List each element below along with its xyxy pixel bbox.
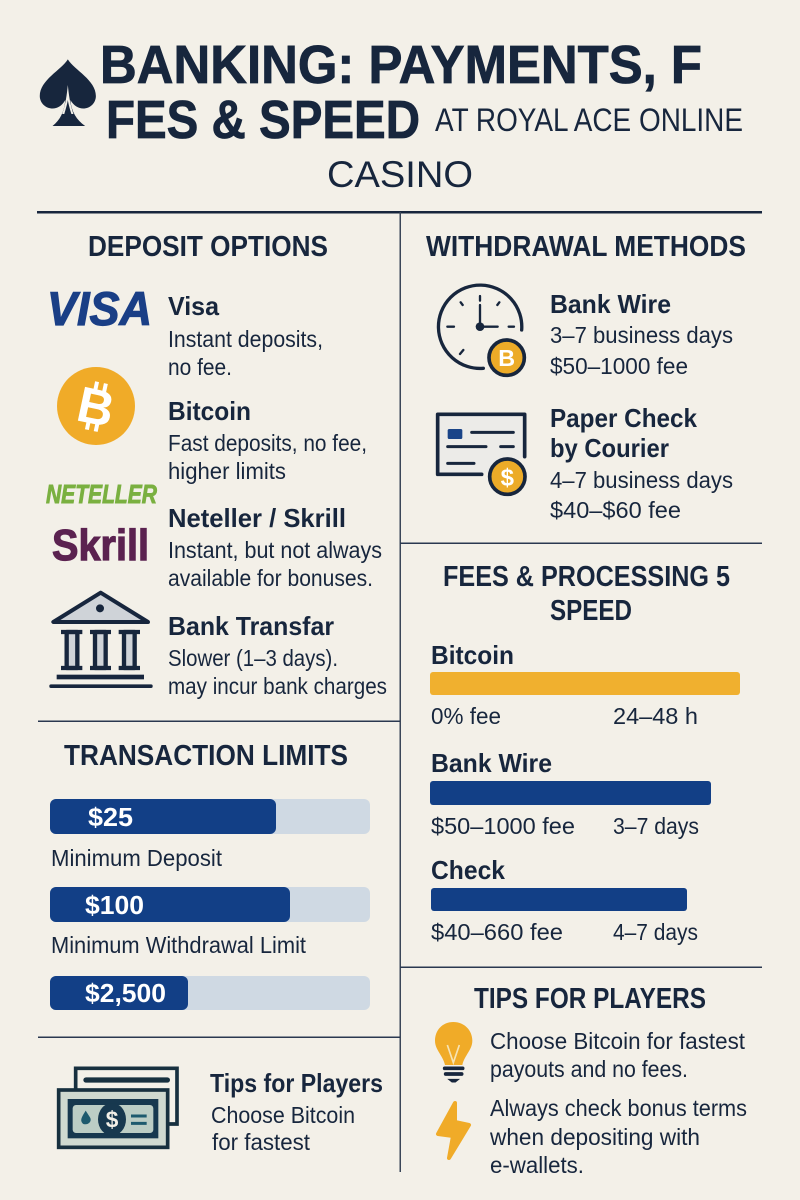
icon: clock with bitcoin coin: B: [498, 345, 515, 371]
item: bank transfer: [168, 611, 387, 699]
icon: bitcoin coin: [57, 367, 135, 445]
title block: [40, 35, 743, 195]
heading: tips for players: TIPS FOR PLAYERS: [474, 983, 706, 1015]
row: bitcoin: 24–48 h: [613, 703, 698, 729]
icon: neteller logo: NETELLER: [46, 479, 157, 509]
bar: maximum limit: $2,500: [85, 978, 166, 1008]
title line 1: BANKING: PAYMENTS, F: [100, 35, 702, 95]
item: paper check by courier: $40–$60 fee: [550, 497, 681, 523]
icon: lightning bolt: [438, 1103, 469, 1158]
title line 2: FES & SPEED: [106, 90, 420, 150]
item: bank transfer: Bank Transfar: [168, 611, 334, 641]
text: tips for players: for fastest: [212, 1129, 311, 1155]
item: bitcoin: Fast deposits, no fee,: [168, 430, 367, 456]
icon: banknotes: [59, 1068, 177, 1147]
text: tips for players: [210, 1068, 383, 1155]
item: neteller and skrill: [168, 503, 382, 591]
item: bitcoin: Bitcoin: [168, 396, 251, 426]
label: minimum withdrawal limit: Minimum Withdrawal Limit: [51, 932, 307, 958]
heading: fees and processing speed: SPEED: [550, 595, 632, 627]
row: bank wire: [430, 748, 711, 839]
text: tips for players: Tips for Players: [210, 1068, 383, 1098]
row: check: 4–7 days: [613, 919, 698, 945]
subtitle line 2: CASINO: [327, 154, 473, 195]
row: bitcoin: [430, 640, 740, 729]
icon: spade: [40, 59, 96, 126]
item: bank wire: 3–7 business days: [550, 322, 733, 348]
item: paper check by courier: Paper Check: [550, 403, 697, 433]
bar: minimum withdrawal: $100: [85, 890, 144, 920]
icon: light bulb: [435, 1022, 472, 1082]
icon: banknotes: $: [106, 1106, 119, 1132]
label: minimum deposit: Minimum Deposit: [51, 845, 223, 871]
icon: paper check with dollar coin: [438, 414, 525, 494]
subtitle line 1: AT ROYAL ACE ONLINE: [435, 102, 743, 138]
heading: deposit options: DEPOSIT OPTIONS: [88, 231, 328, 263]
item: bank transfer: Slower (1–3 days).: [168, 645, 338, 671]
tip: choose bitcoin: payouts and no fees.: [490, 1056, 688, 1082]
item: bitcoin: [168, 396, 367, 484]
bar: minimum deposit: $25: [88, 802, 133, 832]
heading: fees and processing speed: [443, 561, 730, 627]
bar: minimum withdrawal: [50, 887, 370, 922]
item: visa: no fee.: [168, 354, 232, 380]
item: paper check by courier: [550, 403, 733, 523]
item: neteller and skrill: available for bonuses.: [168, 565, 373, 591]
heading: transaction limits: TRANSACTION LIMITS: [64, 740, 348, 772]
item: bank wire: Bank Wire: [550, 289, 671, 319]
icon: visa logo: VISA: [47, 282, 152, 335]
heading: withdrawal methods: WITHDRAWAL METHODS: [426, 231, 746, 263]
item: bank wire: $50–1000 fee: [550, 353, 688, 379]
item: neteller and skrill: Instant, but not always: [168, 537, 382, 563]
text: tips for players: Choose Bitcoin: [211, 1102, 355, 1128]
row: bitcoin: 0% fee: [431, 703, 501, 729]
tip: choose bitcoin: Choose Bitcoin for fastest: [490, 1028, 746, 1054]
item: bank wire: [550, 289, 733, 379]
tip: check bonus terms: when depositing with: [489, 1124, 700, 1150]
icon: paper check with dollar coin: $: [501, 464, 514, 491]
item: paper check by courier: 4–7 business days: [550, 467, 733, 493]
tip: check bonus terms: [489, 1095, 747, 1178]
tip: check bonus terms: Always check bonus terms: [490, 1095, 747, 1121]
item: visa: [168, 291, 323, 380]
panel: bottom left tips: [59, 1068, 383, 1155]
item: bank transfer: may incur bank charges: [168, 673, 387, 699]
item: bitcoin: higher limits: [168, 458, 286, 484]
panel: tips for players: [435, 983, 747, 1178]
panel: transaction limits: [50, 740, 370, 1010]
bar: maximum limit: [50, 976, 370, 1010]
item: visa: Visa: [168, 291, 220, 321]
row: check: $40–660 fee: [431, 919, 563, 945]
bar: minimum deposit: [50, 799, 370, 834]
item: paper check by courier: by Courier: [550, 433, 669, 463]
icon: clock with bitcoin coin: [438, 285, 524, 375]
icon: bank building: [49, 593, 153, 688]
row: bank wire: 3–7 days: [613, 813, 699, 839]
panel: withdrawal methods: [426, 231, 746, 523]
icon: skrill logo: Skrill: [52, 521, 149, 570]
panel: fees and processing speed: [430, 561, 740, 945]
row: bitcoin: Bitcoin: [431, 640, 514, 670]
row: check: Check: [431, 855, 506, 885]
tip: choose bitcoin: [490, 1028, 746, 1082]
row: bank wire: $50–1000 fee: [431, 813, 575, 839]
icon: bitcoin coin: B: [72, 376, 119, 438]
panel: deposit options: [46, 231, 387, 699]
heading: fees and processing speed: FEES & PROCESSING 5: [443, 561, 730, 593]
tip: check bonus terms: e-wallets.: [490, 1152, 584, 1178]
item: visa: Instant deposits,: [168, 326, 323, 352]
item: neteller and skrill: Neteller / Skrill: [168, 503, 346, 533]
row: check: [431, 855, 698, 945]
row: bank wire: Bank Wire: [431, 748, 552, 778]
